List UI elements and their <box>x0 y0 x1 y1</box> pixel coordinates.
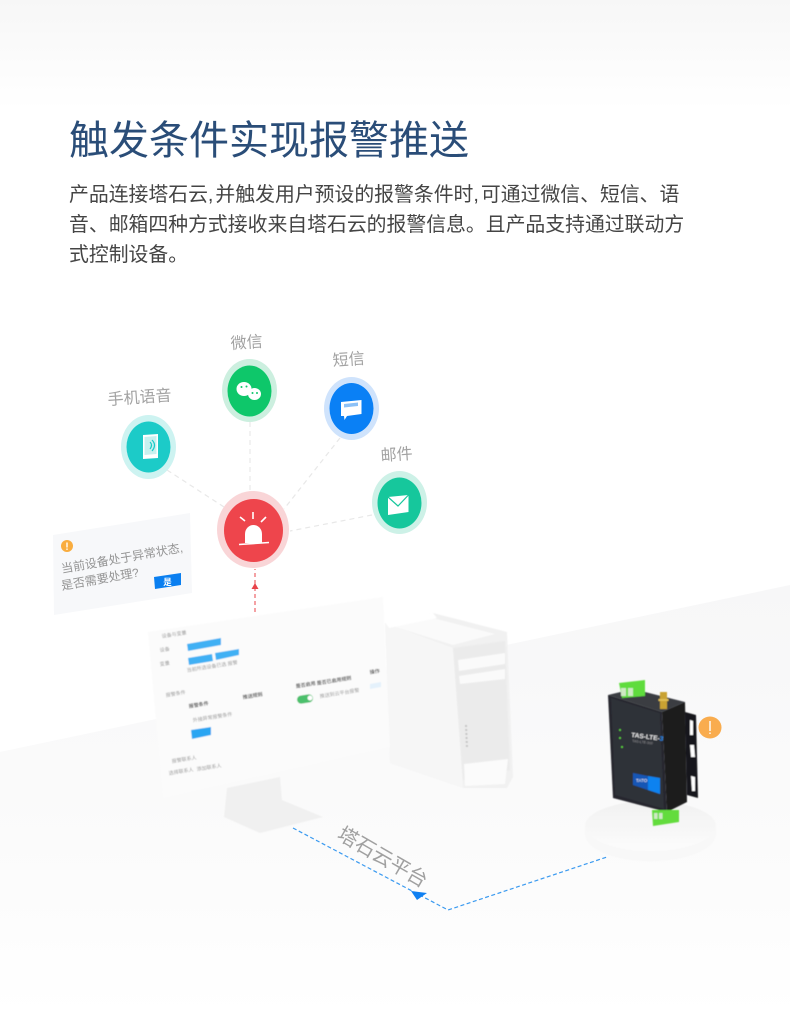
alert message: 是否需要处理? <box>60 565 140 593</box>
monitor screen content: 变量 <box>159 659 170 668</box>
monitor screen content: 推送到云平台报警 <box>319 687 360 700</box>
label: WeChat: 微信 <box>230 333 263 353</box>
icon: phone voice <box>121 415 176 479</box>
label: email: 邮件 <box>380 445 413 465</box>
monitor screen content: 添加联系人 <box>196 762 222 773</box>
device: TAS-LTE gateway: TATO <box>636 778 648 783</box>
device label: TAS-LTE-360 <box>632 739 653 746</box>
device: TAS-LTE gateway <box>608 680 698 826</box>
icon: alarm <box>217 491 289 568</box>
label: SMS: 短信 <box>332 350 365 370</box>
monitor screen content: 推送规则 <box>242 691 263 701</box>
label: phone voice: 手机语音 <box>107 387 172 409</box>
intro text <box>69 184 684 266</box>
pedestal <box>585 801 716 861</box>
monitor screen content: 操作 <box>369 667 380 676</box>
monitor screen content: 报警条件 <box>188 700 209 710</box>
monitor screen content: 报警条件 <box>165 689 186 699</box>
device label: TAS-LTE-3 <box>631 732 664 743</box>
intro text: 音、邮箱四种方式接收来自塔石云的报警信息。且产品支持通过联动方 <box>69 214 684 236</box>
arrow: blue <box>411 891 427 900</box>
monitor screen content: 选择联系人 <box>168 766 194 777</box>
alert message: 当前设备处于异常状态, <box>60 540 184 576</box>
button: 是 <box>163 577 172 587</box>
green terminal top <box>619 680 645 698</box>
monitor screen content: 设备 <box>159 645 170 654</box>
connector lines <box>167 422 372 531</box>
arrow: red dashed up <box>252 569 258 612</box>
intro text: 产品连接塔石云, 并触发用户预设的报警条件时, 可通过微信、短信、语 <box>69 184 679 206</box>
monitor screen content: 报警联系人 <box>171 754 197 765</box>
monitor stand <box>224 777 323 833</box>
monitor screen content: 设备与变量 <box>161 629 187 640</box>
server tower <box>385 613 513 788</box>
monitor screen content: 外接异常报警条件 <box>192 711 233 724</box>
intro text: 式控制设备。 <box>69 244 188 266</box>
alert message <box>60 540 184 593</box>
icon: WeChat <box>222 359 277 422</box>
monitor screen content <box>159 629 381 777</box>
icon: warning <box>61 540 73 552</box>
title: 触发条件实现报警推送 <box>69 119 469 163</box>
monitor screen content: 当前所选设备已选 报警 <box>186 659 238 674</box>
icon: device warning <box>698 716 722 738</box>
monitor screen content: 是否启用 <box>295 680 316 690</box>
antenna <box>658 692 668 709</box>
monitor <box>148 597 390 833</box>
label: platform: 塔石云平台 <box>334 822 432 892</box>
dashed path to platform <box>293 828 607 910</box>
alert card <box>53 513 192 615</box>
icon: SMS <box>324 377 379 440</box>
monitor screen content: 是否已启用规则 <box>316 675 352 687</box>
green terminal bottom <box>652 810 679 826</box>
icon: email <box>372 471 427 534</box>
